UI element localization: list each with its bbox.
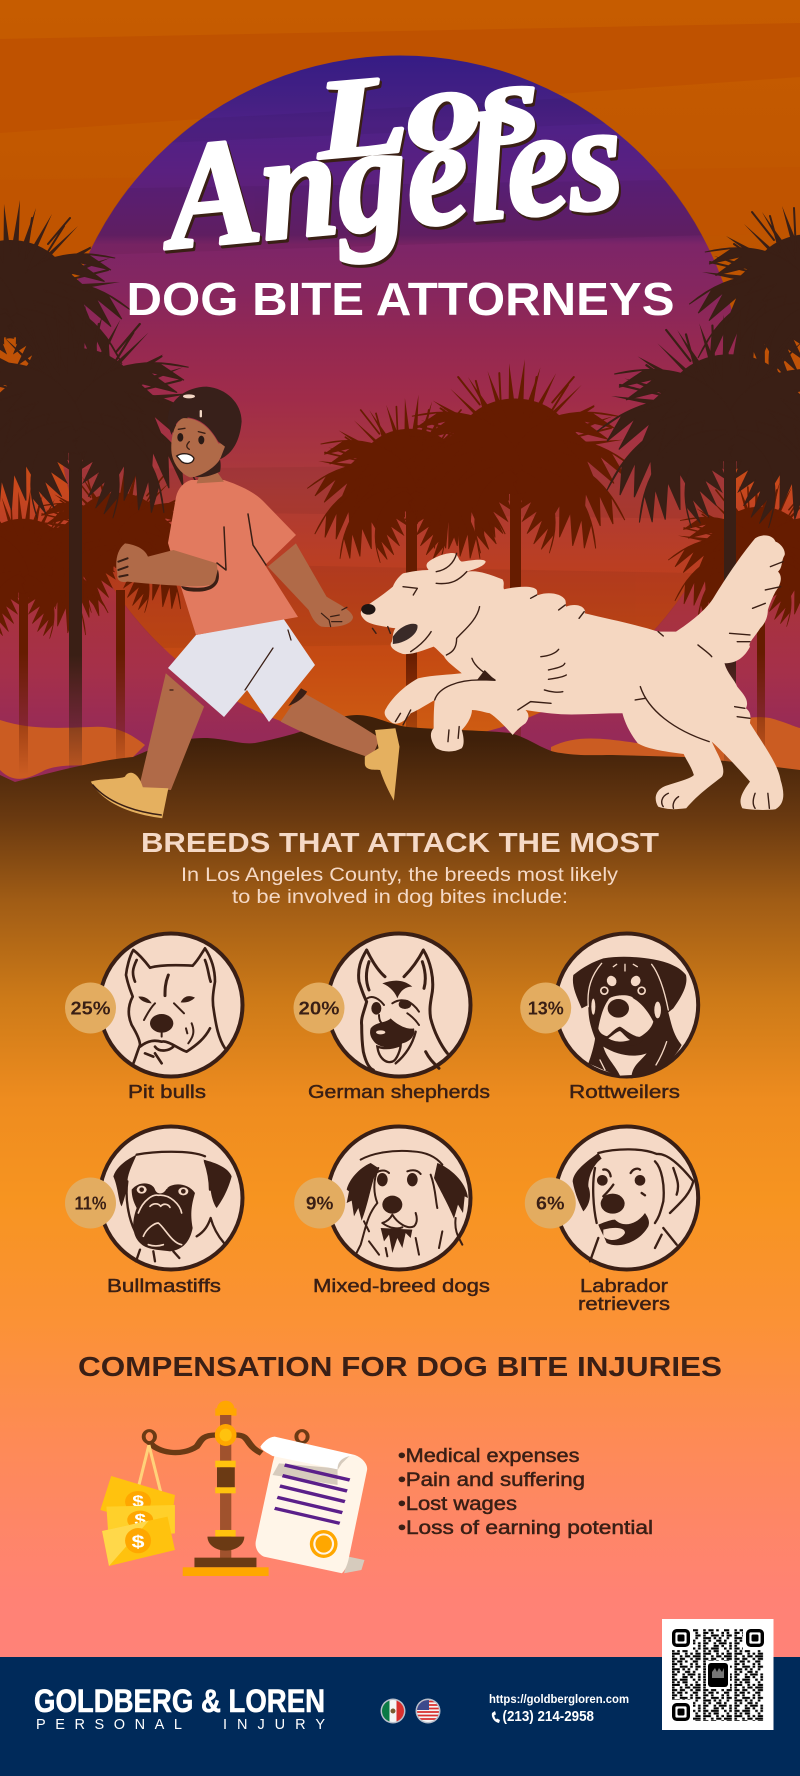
footer band: [0, 1657, 800, 1776]
badge: 13%: 13%: [528, 998, 564, 1018]
badge: 9%: [294, 1178, 345, 1228]
breed: rottweilers: [520, 934, 698, 1102]
illustration: attacking white dog: [361, 535, 785, 810]
badge: 20%: [294, 982, 344, 1034]
intro text: to be involved in dog bites include:: [232, 886, 568, 908]
icon: scales with money and document: [100, 1401, 367, 1576]
head and hair: [168, 387, 242, 483]
badge: 11%: [65, 1178, 116, 1228]
flag icons: [380, 1698, 440, 1724]
icon: mixed-breed dog head: [328, 1126, 470, 1270]
back arm: [116, 543, 219, 592]
ground and lower gradient panel: [0, 715, 800, 1660]
money bills: [100, 1445, 175, 1566]
breed: german shepherds: [294, 934, 490, 1102]
contact details: https://goldbergloren.com: [489, 1692, 629, 1706]
badge: 20%: 20%: [298, 998, 340, 1018]
compensation list: [398, 1446, 653, 1539]
scale post and beam: [144, 1401, 308, 1576]
money bills: $: [132, 1492, 145, 1510]
label: Labrador: [580, 1276, 668, 1296]
icon: USA flag: [416, 1698, 440, 1724]
compensation list: •Loss of earning potential: [398, 1518, 653, 1539]
badge: 11%: 11%: [74, 1194, 106, 1214]
badge: 13%: [520, 982, 571, 1034]
compensation list: •Pain and suffering: [398, 1470, 585, 1491]
QR code: [662, 1619, 774, 1730]
icon: rottweiler head: [555, 934, 698, 1078]
heading: breeds that attack the most: BREEDS THAT ATTACK THE MOST: [141, 827, 659, 858]
orange dunes: [0, 717, 800, 790]
breed: mixed-breed dogs: [294, 1126, 490, 1296]
label: Bullmastiffs: [107, 1276, 221, 1296]
sunset sky background: [0, 0, 800, 800]
logo: Goldberg & Loren: PERSONAL: [36, 1717, 182, 1733]
background palm trees: [0, 359, 800, 775]
label: Pit bulls: [128, 1082, 206, 1102]
compensation list: •Lost wages: [398, 1494, 517, 1515]
contact details: (213) 214-2958: [502, 1709, 594, 1725]
badge: 6%: 6%: [536, 1194, 565, 1214]
dog nose: [361, 604, 376, 615]
icon: german shepherd head: [328, 934, 470, 1076]
dog body: [361, 535, 785, 810]
icon: Mexico flag: [380, 1698, 406, 1724]
dog fur lines: [372, 553, 783, 808]
badge: 25%: 25%: [70, 998, 110, 1018]
subtitle: Dog Bite Attorneys: DOG BITE ATTORNEYS: [126, 273, 674, 325]
icon: bullmastiff head: [100, 1126, 242, 1270]
illustration: frightened man running: [91, 387, 399, 818]
money bills: $: [134, 1510, 147, 1528]
t-shirt: [168, 480, 298, 635]
foreground palm trees: [0, 194, 800, 785]
breed: bullmastiffs: [65, 1126, 242, 1296]
compensation list: •Medical expenses: [398, 1446, 580, 1467]
intro text: [181, 864, 618, 908]
label: [578, 1276, 670, 1314]
legal document: [256, 1437, 367, 1573]
sun arch circle: [63, 56, 737, 732]
badge: 25%: [65, 982, 116, 1034]
badge: 6%: [525, 1178, 576, 1228]
money bills: $: [132, 1532, 145, 1552]
icon: labrador head: [555, 1126, 698, 1270]
heading: compensation: COMPENSATION FOR DOG BITE INJURIES: [78, 1351, 722, 1382]
title: Los Angeles: Los: [310, 40, 543, 183]
badge: 9%: 9%: [306, 1194, 333, 1214]
label: retrievers: [578, 1294, 670, 1314]
label: German shepherds: [308, 1082, 490, 1102]
title: Los Angeles: Angeles: [152, 71, 629, 282]
label: Mixed-breed dogs: [313, 1276, 490, 1296]
logo: Goldberg & Loren: [34, 1683, 325, 1733]
legs and shoes: [91, 673, 399, 818]
front arm and hand: [268, 543, 353, 627]
breed: labrador retrievers: [525, 1126, 698, 1314]
contact details: [489, 1692, 629, 1725]
shorts: [168, 618, 315, 722]
logo: Goldberg & Loren: GOLDBERG & LOREN: [34, 1683, 325, 1719]
dog mouth: [393, 624, 418, 644]
icon: pit bull head: [100, 934, 242, 1076]
logo: Goldberg & Loren: INJURY: [223, 1717, 325, 1733]
label: Rottweilers: [569, 1082, 680, 1102]
breed: pit bulls: [65, 934, 242, 1102]
intro text: In Los Angeles County, the breeds most likely: [181, 864, 618, 886]
